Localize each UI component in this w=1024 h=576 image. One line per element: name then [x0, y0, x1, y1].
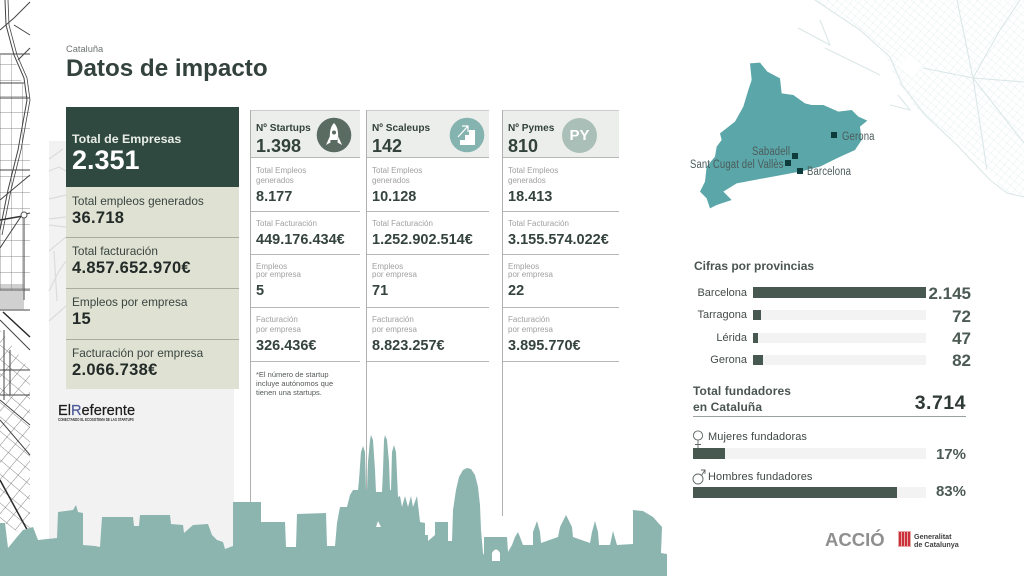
metric: empleos por empresa: 15: [72, 310, 91, 328]
header: pymes: [503, 110, 619, 158]
header: scaleups: 142: [372, 136, 402, 156]
metric: empleos por empresa scaleups: por empresa: [372, 270, 417, 279]
header: pymes: 810: [508, 136, 538, 156]
icon: PY badge: [562, 118, 597, 153]
header: startups: Nº Startups: [256, 123, 311, 134]
row: Tarragona: 72: [952, 307, 971, 326]
label: total fundadores: Total fundadores: [693, 384, 791, 398]
row: Tarragona: [697, 307, 971, 326]
metric: facturacion por empresa startups: 326.436€: [256, 338, 316, 354]
panel: totals summary: [66, 187, 239, 389]
metric: facturacion por empresa pymes: 3.895.770€: [508, 338, 581, 354]
metric: empleos por empresa startups: Empleos: [256, 262, 287, 271]
row: Lerida: Lérida: [716, 332, 747, 344]
footnote: *El número de startup: [256, 370, 329, 379]
row: mujeres fundadoras: 17%: [936, 446, 966, 463]
row: Lerida: [716, 329, 971, 348]
metric: empleos scaleups: 10.128: [372, 189, 416, 205]
marker: Barcelona: Barcelona: [807, 166, 851, 178]
metric: facturacion startups: Total Facturación: [256, 219, 317, 228]
value: total de empresas: 2.351: [72, 145, 140, 175]
header: scaleups: Nº Scaleups: [372, 123, 430, 134]
metric: facturacion scaleups: [372, 219, 473, 248]
metric: empleos startups: 8.177: [256, 189, 292, 205]
row: Tarragona: Tarragona: [697, 309, 747, 321]
value: total fundadores: 3.714: [915, 392, 966, 414]
icon: rocket: [316, 118, 352, 152]
metric: total empleos: [72, 194, 204, 227]
header: scaleups: [367, 110, 489, 158]
metric: facturacion por empresa pymes: [508, 315, 581, 354]
row: mujeres fundadoras: Mujeres fundadoras: [708, 431, 807, 443]
metric: facturacion por empresa startups: por empresa: [256, 325, 301, 334]
metric: facturacion por empresa pymes: Facturación: [508, 315, 550, 324]
metric: total facturacion: 4.857.652.970€: [72, 259, 191, 277]
row: Gerona: Gerona: [710, 354, 747, 366]
panel: total fundadores: [693, 384, 966, 417]
logo: ACCIO: ACCIÓ: [825, 529, 885, 550]
metric: facturacion startups: [256, 219, 345, 248]
row: Gerona: 82: [952, 351, 971, 370]
map: street map left strip: [0, 0, 30, 532]
metric: empleos startups: Total Empleos: [256, 166, 306, 175]
label: total fundadores: en Cataluña: [693, 400, 762, 414]
row: hombres fundadores: Hombres fundadores: [708, 471, 813, 483]
subtitle: Cataluña: [66, 44, 103, 54]
row: hombres fundadores: [692, 470, 966, 500]
title: Datos de impacto: [66, 55, 268, 82]
bar chart: provinces: [697, 284, 971, 370]
metric: facturacion por empresa: Facturación por empresa: [72, 346, 203, 360]
heading: cifras por provincias: Cifras por provincias: [694, 259, 814, 273]
metric: empleos por empresa: Empleos por empresa: [72, 295, 187, 309]
footnote: incluye autónomos que: [256, 379, 333, 388]
metric: empleos pymes: Total Empleos: [508, 166, 558, 175]
label: total fundadores: [693, 384, 791, 414]
metric: empleos pymes: 18.413: [508, 189, 552, 205]
row: Barcelona: Barcelona: [697, 287, 747, 299]
marker: Sabadell: Sabadell: [752, 146, 790, 158]
metric: facturacion por empresa: [72, 346, 204, 379]
metric: facturacion por empresa scaleups: [372, 315, 445, 354]
panel: total de empresas: [66, 107, 239, 187]
panel: startups: [250, 110, 360, 502]
row: hombres fundadores: 83%: [936, 483, 966, 500]
logo: Generalitat de Catalunya: Generalitat: [914, 532, 952, 541]
panel: scaleups: [366, 110, 489, 510]
metric: empleos por empresa scaleups: 71: [372, 283, 388, 299]
metric: facturacion pymes: Total Facturación: [508, 219, 569, 228]
metric: empleos por empresa pymes: [508, 262, 553, 299]
map: Catalonia with city markers: [690, 62, 875, 208]
icon: female symbol: [693, 430, 703, 448]
metric: facturacion scaleups: 1.252.902.514€: [372, 232, 473, 248]
row: Lerida: 47: [952, 329, 971, 348]
metric: total empleos: 36.718: [72, 209, 124, 227]
logo: Generalitat de Catalunya: [898, 531, 959, 549]
metric: empleos scaleups: Total Empleos: [372, 166, 422, 175]
metric: facturacion por empresa scaleups: 8.823.257€: [372, 338, 445, 354]
metric: total empleos: Total empleos generados: [72, 194, 204, 208]
metric: facturacion startups: 449.176.434€: [256, 232, 345, 248]
icon: senyera flag: [898, 531, 911, 548]
icon: male symbol: [692, 470, 706, 484]
metric: facturacion por empresa scaleups: Facturación: [372, 315, 414, 324]
header: pymes: Nº Pymes: [508, 123, 554, 134]
marker: Sant Cugat del Valles: Sant Cugat del Vallès: [690, 159, 784, 171]
metric: total facturacion: [72, 244, 191, 277]
metric: facturacion pymes: [508, 219, 609, 248]
metric: facturacion pymes: 3.155.574.022€: [508, 232, 609, 248]
metric: empleos startups: generados: [256, 176, 294, 185]
logo: El Referente: CONECTANDO EL ECOSISTEMA DE LAS STARTUPS: [58, 417, 134, 422]
metric: total facturacion: Total facturación: [72, 244, 158, 258]
metric: empleos pymes: [508, 166, 558, 205]
label: total de empresas: Total de Empresas: [72, 132, 181, 146]
logo: Generalitat de Catalunya: de Catalunya: [914, 540, 959, 549]
metric: facturacion por empresa pymes: por empresa: [508, 325, 553, 334]
metric: empleos por empresa startups: 5: [256, 283, 264, 299]
panel: light grey backdrop: [49, 141, 234, 576]
metric: facturacion por empresa startups: Facturación: [256, 315, 298, 324]
metric: facturacion por empresa startups: [256, 315, 316, 354]
icon: PY badge: PY: [569, 127, 590, 144]
panel: pymes: [502, 110, 619, 516]
metric: empleos pymes: generados: [508, 176, 546, 185]
metric: empleos scaleups: generados: [372, 176, 410, 185]
footnote: [256, 370, 333, 397]
row: Gerona: [710, 351, 971, 370]
row: Barcelona: 2.145: [928, 284, 971, 303]
metric: empleos por empresa startups: por empresa: [256, 270, 301, 279]
row: mujeres fundadoras: [693, 430, 966, 463]
logo: El Referente: ElReferente: [58, 403, 135, 419]
metric: empleos por empresa pymes: 22: [508, 283, 524, 299]
row: Barcelona: [697, 284, 971, 303]
metric: facturacion por empresa: 2.066.738€: [72, 361, 158, 379]
map: street lines on grey backdrop: [48, 148, 66, 322]
metric: facturacion por empresa scaleups: por empresa: [372, 325, 417, 334]
map shape: [700, 62, 868, 208]
header: startups: 1.398: [256, 136, 301, 156]
metric: empleos por empresa: [72, 295, 188, 328]
metric: empleos por empresa pymes: Empleos: [508, 262, 539, 271]
metric: empleos por empresa startups: [256, 262, 301, 299]
metric: empleos por empresa scaleups: [372, 262, 417, 299]
icon: stairs with arrow: [450, 118, 484, 152]
metric: empleos scaleups: [372, 166, 422, 205]
map: faint street map top right: [798, 0, 1024, 198]
footnote: tienen una startups.: [256, 388, 322, 397]
metric: empleos por empresa scaleups: Empleos: [372, 262, 403, 271]
header: startups: [251, 110, 360, 158]
metric: empleos startups: [256, 166, 306, 205]
marker: Gerona: Gerona: [842, 131, 875, 143]
metric: facturacion scaleups: Total Facturación: [372, 219, 433, 228]
metric: empleos por empresa pymes: por empresa: [508, 270, 553, 279]
